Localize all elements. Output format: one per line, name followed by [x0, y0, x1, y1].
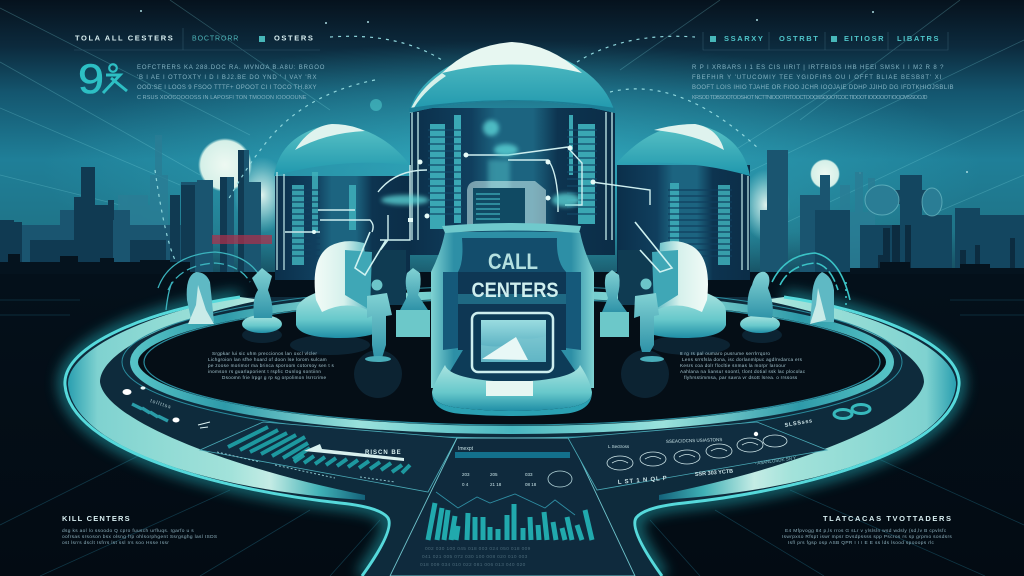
hologram arcs left: [158, 252, 262, 310]
bottom right note: Isfl prs fgsp osp ASB QPR I I I E E ss lds lsood spooops rlc: [788, 540, 935, 546]
figure: pedestal left: [396, 268, 430, 337]
middle panel: chart: 08 18: [525, 482, 537, 487]
right panel: gauges: SSEACIDCNS USIASTONS: [666, 437, 722, 444]
kiosk title: [472, 249, 558, 302]
floor text left: Srgpkar lui sic uhm preccionos lan oxcl vlcler: [212, 351, 317, 356]
kiosk base: [432, 365, 592, 411]
middle panel: chart: Imexpt: [458, 446, 474, 452]
floor text left: [208, 351, 335, 380]
kiosk top lip: [442, 223, 581, 233]
humanoid console: left: [296, 232, 406, 338]
top left nav: TOLA ALL CESTERS: [75, 34, 174, 42]
top right paragraph: KRSOD TDBSOOTOOSHOT NCTTNIOOOTRTOOCTOOOSSOOOTCOC TIDOOT IOOOOOT IOOCMSSOOJD: [692, 95, 928, 101]
haze right: [742, 169, 790, 241]
middle panel: chart: 205: [490, 472, 498, 477]
right panel: gauges: L ST 1 N QL P: [618, 476, 668, 486]
left deck detail: tollttss: [149, 398, 172, 411]
top left nav: BOCTRORR: [192, 36, 239, 42]
floor reflections: [242, 327, 782, 398]
bottom left note: ost lsrrs dsclt Isfrrs lst ssl Irs soo Hsse Issr: [62, 540, 169, 546]
right panel: gauges: [568, 422, 827, 490]
sun right: [810, 159, 840, 189]
bottom right note: Iswrpxso Rfspt iswr mpsr Dvsdpssss spp Pscros rs sp grpmo sosdsrs: [782, 534, 952, 540]
middle panel: chart: 002 030 100 045 018 003 024 050 018 009: [425, 546, 531, 552]
top right paragraph: [692, 65, 954, 101]
bottom right note: E4 Mfpvogg 84 p,ls rros G sLr v ylslsln wsd wdsly (sd,lv B cpvlsfc: [785, 528, 947, 534]
top left paragraph: [137, 65, 325, 101]
inner floor and ring: [122, 286, 902, 438]
kiosk title: CALL: [488, 249, 538, 274]
top right nav: OSTRBT: [779, 34, 819, 43]
floor text right: Kesrs coa dolr flocltie snmas la morpr laroour: [680, 363, 786, 368]
top left nav: OSTERS: [274, 34, 314, 42]
middle panel: chart: 033: [525, 472, 533, 477]
bottom right note: TLATCACAS TVOTTADERS: [823, 514, 953, 523]
floor text left: pe zoose morimor ma brinca sporoom cotorsoy sen t s: [208, 363, 335, 368]
sky light streaks: [0, 0, 1024, 245]
platform outer edge: [65, 297, 959, 576]
top left paragraph: EOFCTRERS KA 288.DOC RA. MVNOA B.A8U: BRGOO: [137, 65, 325, 71]
figure: pedestal right: [600, 270, 629, 337]
top left nav: [74, 28, 320, 50]
middle panel: chart: 0 4: [462, 482, 469, 487]
central tower: [409, 42, 615, 255]
ground silhouette edge: [0, 254, 1024, 274]
dish ornaments: [865, 185, 942, 216]
top left paragraph: 'B I AE I OTTOXTY I D I BJ2.BE DO YND ' I VAY 'RX: [137, 75, 317, 81]
platform light band: left: [68, 297, 365, 500]
right deck detail: [784, 404, 870, 429]
top right nav: EITIOSR: [844, 34, 885, 43]
background sky: [0, 0, 1024, 300]
bottom left note: dsg ks aol lo ssoodo Q cpro fuusch urfluqs. Igarfo u s: [62, 528, 194, 534]
laptop screen: [472, 313, 553, 372]
skyline right: [760, 150, 1024, 275]
figure: right pod: [740, 272, 780, 333]
bottom left note: oofrsas srsoson bsx olsng frp ohlsorphgent Ssrgsghg lasl ISDS: [62, 534, 217, 540]
left deck detail: [122, 386, 210, 428]
top right paragraph: FBEFHIR Y 'UTUCOMIY TEE YGIDFIRS OU I OFFT BLIAE BESB8T' XI: [692, 75, 942, 81]
call centers kiosk: [431, 223, 594, 416]
figure: standing right: [634, 278, 664, 362]
glow nodes and blobs: [312, 99, 596, 234]
platform light band: right: [659, 297, 956, 500]
floor text right: 8 rg rs pal oumaro pusrume serrlrrqoro: [680, 351, 770, 356]
glowing circuit lines: [285, 147, 650, 268]
figure: left pod: [242, 268, 282, 333]
bottom left note: [62, 514, 217, 546]
figure: standing left: [365, 280, 392, 362]
top right nav: LIBATRS: [897, 34, 940, 43]
floor text right: Aahlana na liansur soontl, tlont dotial ssk lac plocolac: [680, 369, 806, 374]
right panel: gauges: - ASANLOSDK SN Y: [754, 455, 796, 466]
kiosk title: CENTERS: [472, 279, 558, 302]
bottom right note: [782, 514, 953, 546]
haze left: [234, 157, 290, 233]
floor text right: Lens srrsfsla dona, isc dorlanmlpuc agdlrvdarca ers: [682, 357, 803, 362]
top right paragraph: R P I XRBARS I 1 ES CIS IIRIT | IRTFBIDS IHB HEEI SMSK I I M2 R 8 ?: [692, 65, 944, 71]
ground: [0, 272, 1024, 576]
skyline left: [0, 135, 272, 282]
figure: left outer: [187, 272, 214, 324]
monitor behind kiosk: [467, 181, 546, 225]
side tower: left: [274, 124, 410, 280]
top right nav: [703, 32, 948, 50]
middle panel: chart: 041 021 005 072 030 100 008 020 010 003: [422, 554, 528, 560]
middle panel: chart: 21 18: [490, 482, 502, 487]
hologram arcs right: [772, 253, 850, 305]
stat 9%: [78, 55, 127, 102]
top left paragraph: C RSUS XOOCOOOOSS IN LAPOSFI TON TMOOON IOOOOUNE: [137, 95, 307, 101]
outer platform glow: [65, 297, 959, 576]
middle panel: chart: 018 009 034 010 022 081 006 013 040 020: [420, 562, 526, 568]
right panel: gauges: SSR 303 YCTB: [695, 469, 733, 478]
right deck detail: SLSSsss: [784, 418, 813, 429]
stat 9%: 9: [78, 55, 104, 102]
bottom left note: KILL CENTERS: [62, 514, 131, 523]
left panel: bars: RISCN BE: [365, 450, 402, 456]
decorative dots: [140, 10, 968, 174]
side tower: right: [615, 124, 750, 280]
top right paragraph: BOOFT LOIS IHIO TJAHE OR FIOO JCHR IOOJAIE DDHP JJIHD DG IFDTKHIOJSBLIB: [692, 85, 954, 91]
floor text right: [680, 351, 806, 380]
floor text left: inomson rs guarlaporient t rspfic Ounlog sontiinn: [208, 369, 321, 374]
left panel: bars: [200, 422, 457, 492]
figure: right outer: [810, 272, 834, 324]
kiosk body: [431, 232, 594, 388]
top right nav: SSARXY: [724, 34, 764, 43]
right panel: gauges: L Sectross: [608, 444, 630, 449]
floor grid lines: [0, 300, 1024, 576]
middle panel: chart: 203: [462, 472, 470, 477]
dashed arcs: [155, 36, 760, 262]
floor text left: Lichgroion lan sfhe hoard of doon lse lorom sulcam: [208, 357, 327, 362]
laptop keyboard: [446, 350, 580, 386]
top left paragraph: OOD:SE I LOOS 9 FSOO TTTF+ OPOOT CI I TOCO TH.8XY: [137, 85, 317, 91]
platform deck: [65, 297, 959, 576]
server stripes: [430, 115, 595, 229]
middle panel: chart: [390, 438, 635, 576]
floor text right: flyhrsstimmsa, par savra vr dsott lsrea. o rrssoss: [684, 375, 798, 380]
humanoid console: right: [618, 222, 726, 338]
sun left: [198, 138, 252, 192]
floor text left: Dsoomn frie lrpgr g rp sg orpolimon lsrrcrime: [222, 375, 327, 380]
